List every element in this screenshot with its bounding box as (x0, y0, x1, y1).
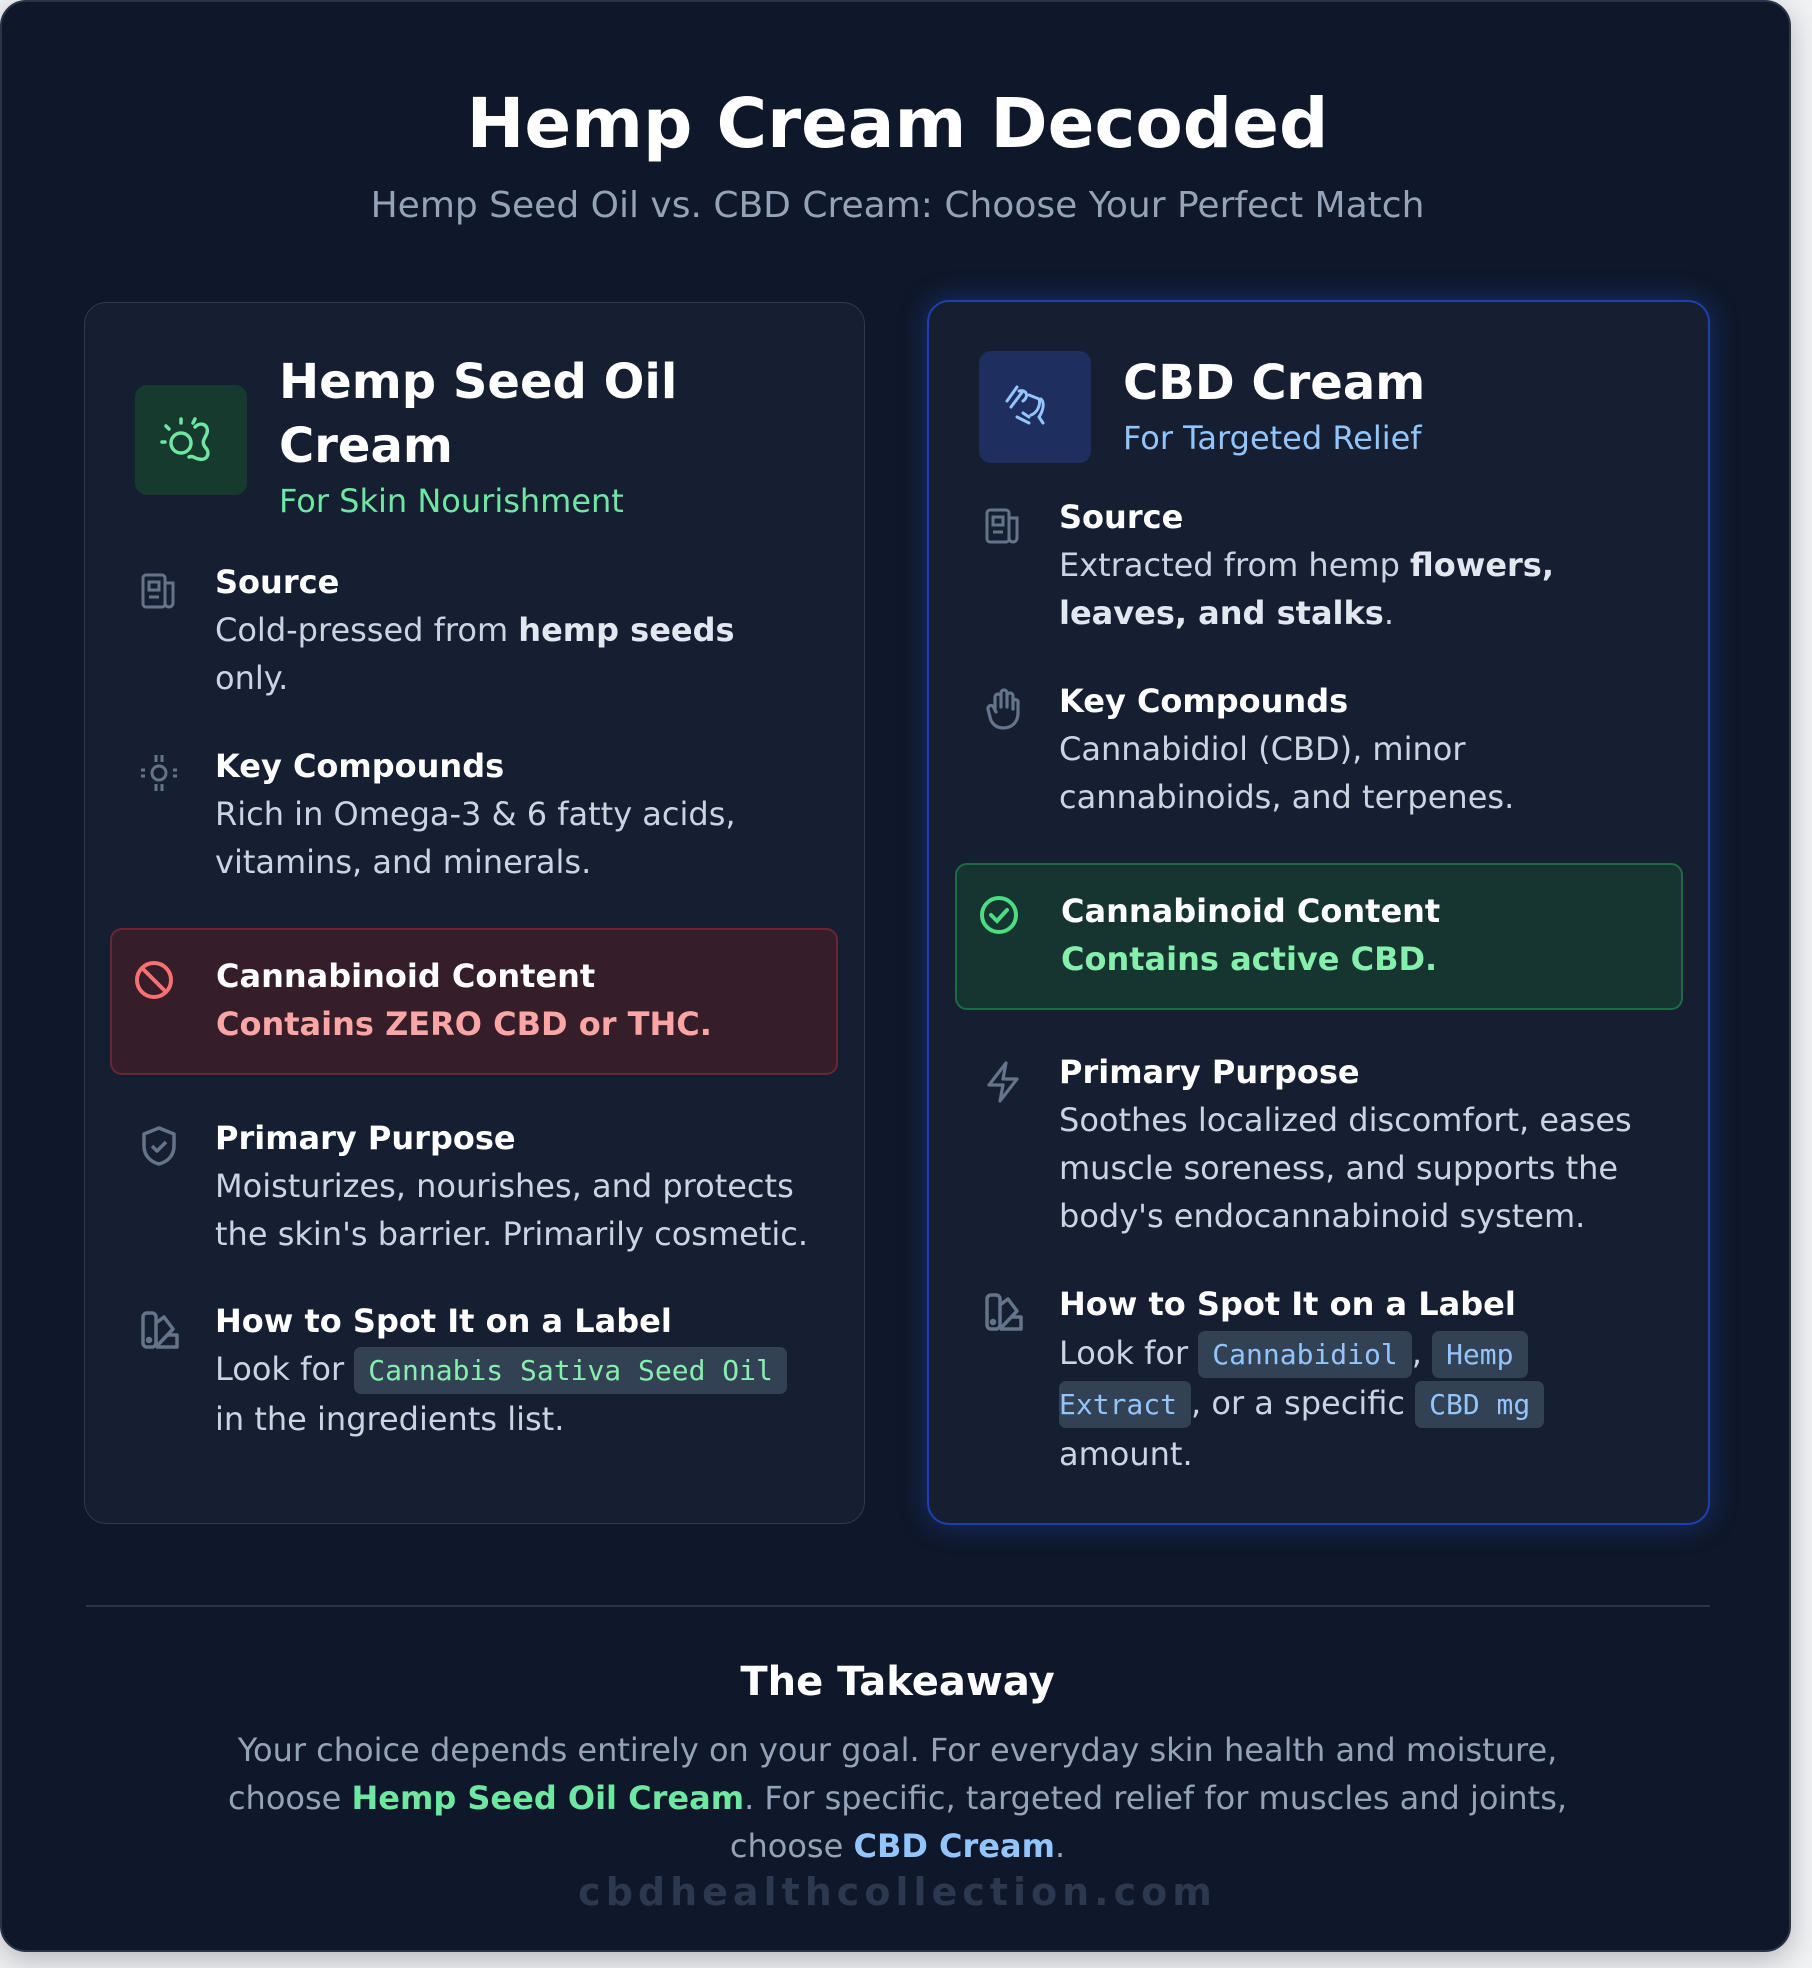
item: key compounds: cannabinoids, and terpenes. (1059, 778, 1514, 816)
callout: contains cbd (955, 863, 1683, 1010)
item: source: leaves, and stalks. (1059, 594, 1394, 632)
item: label: Extract , or a specific CBD mg (1059, 1384, 1530, 1422)
title: Hemp Cream Decoded (467, 84, 1328, 164)
item: primary purpose: Moisturizes, nourishes, and protects (215, 1167, 794, 1205)
icon: relief (979, 351, 1091, 463)
item: key compounds: Cannabidiol (CBD), minor (1059, 730, 1466, 768)
item: primary purpose: Primary Purpose (1059, 1053, 1360, 1091)
icon: shield (142, 1126, 176, 1166)
item: source: Extracted from hemp flowers, (1059, 546, 1554, 584)
icon: check (980, 896, 1018, 934)
item: primary purpose (215, 1119, 808, 1253)
item: key compounds: Rich in Omega-3 & 6 fatty acids, (215, 795, 736, 833)
watermark: cbdhealthcollection.com (578, 1870, 1217, 1914)
item: label: amount. (1059, 1434, 1193, 1472)
icon: seed (135, 385, 247, 495)
item: primary purpose: muscle soreness, and supports the (1059, 1149, 1618, 1187)
callout: contains cbd: Contains active CBD. (1061, 940, 1437, 978)
item: key compounds (1059, 682, 1514, 816)
item: source: only. (215, 659, 288, 697)
item: source (215, 563, 735, 697)
item: source: Cold-pressed from hemp seeds (215, 611, 735, 649)
panel: cbd cream (927, 300, 1710, 1525)
item: primary purpose: the skin's barrier. Primarily cosmetic. (215, 1215, 808, 1253)
subtitle: Hemp Seed Oil vs. CBD Cream: Choose Your Perfect Match (371, 185, 1424, 226)
item: label: How to Spot It on a Label (1059, 1285, 1516, 1323)
item: key compounds (215, 747, 736, 881)
item: label: Look for Cannabis Sativa Seed Oil (215, 1350, 773, 1388)
tagline: For Targeted Relief (1123, 419, 1422, 457)
callout: zero cannabinoids (110, 928, 838, 1075)
takeaway text (228, 1731, 1567, 1865)
item: key compounds: Key Compounds (215, 747, 504, 785)
takeaway text: choose CBD Cream. (730, 1827, 1065, 1865)
item: key compounds: vitamins, and minerals. (215, 843, 591, 881)
icon: sun (141, 755, 177, 791)
item: source: Source (215, 563, 339, 601)
item: primary purpose: Primary Purpose (215, 1119, 516, 1157)
icon: swatch (985, 1293, 1023, 1331)
heading (279, 354, 677, 474)
takeaway text: Your choice depends entirely on your goal. For everyday skin health and moisture, (238, 1731, 1557, 1769)
icon: bolt (987, 1061, 1019, 1103)
item: primary purpose (1059, 1053, 1632, 1235)
heading: Cream (279, 418, 453, 474)
item: source: Source (1059, 498, 1183, 536)
takeaway heading: The Takeaway (740, 1659, 1055, 1705)
icon: newspaper (986, 508, 1018, 544)
takeaway text: choose Hemp Seed Oil Cream. For specific, targeted relief for muscles and joints, (228, 1779, 1567, 1817)
item: key compounds: Key Compounds (1059, 682, 1348, 720)
item: label: How to Spot It on a Label (215, 1302, 672, 1340)
heading: CBD Cream (1123, 355, 1425, 411)
item: label (1059, 1285, 1544, 1472)
callout: contains cbd: Cannabinoid Content (1061, 892, 1440, 930)
item: primary purpose: body's endocannabinoid system. (1059, 1197, 1585, 1235)
item: label: in the ingredients list. (215, 1400, 564, 1438)
icon: hand (986, 688, 1020, 730)
icon: newspaper (142, 574, 174, 608)
item: primary purpose: Soothes localized discomfort, eases (1059, 1101, 1632, 1139)
callout: zero cannabinoids: Contains ZERO CBD or THC. (216, 1005, 712, 1043)
item: source (1059, 498, 1554, 632)
tagline: For Skin Nourishment (279, 482, 624, 520)
heading: Hemp Seed Oil (279, 354, 677, 410)
item: label (215, 1302, 787, 1438)
icon: ban (135, 961, 173, 999)
callout: zero cannabinoids: Cannabinoid Content (216, 957, 595, 995)
icon: swatch (141, 1311, 179, 1349)
item: label: Look for Cannabidiol , Hemp (1059, 1334, 1514, 1372)
panel: hemp seed oil cream (84, 302, 865, 1524)
